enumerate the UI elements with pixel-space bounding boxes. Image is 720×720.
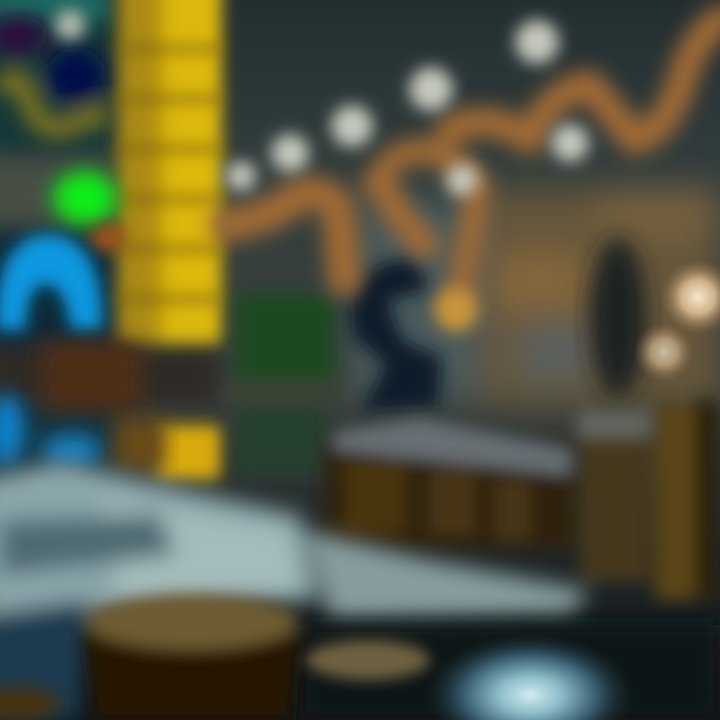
dark figure on the right: [590, 238, 646, 398]
open paper sheet: [0, 462, 590, 720]
white dot in the chart: [55, 10, 85, 40]
brown block: [42, 342, 142, 412]
panel: warm shelves background on the right: [350, 190, 720, 405]
line chart: orange trend line: [225, 20, 720, 300]
bottom left brown corner: [0, 688, 60, 720]
small coin: [306, 640, 430, 680]
table reflection glow: [425, 633, 635, 720]
coin stacks: [325, 400, 720, 600]
yellow column of coins: [118, 0, 222, 480]
blue lower blobs: [0, 394, 102, 466]
chart blobs: navy and purple: [0, 16, 108, 129]
orange block beside yellow coins: [115, 420, 165, 470]
green square panel: [228, 295, 338, 475]
white chart dots: [226, 20, 589, 196]
icon: green blob: [53, 171, 117, 225]
panel: dark left column with chart: [0, 0, 220, 470]
lamp glow: [660, 259, 720, 335]
second lamp glow: [634, 322, 694, 382]
coin column ridges: [117, 44, 223, 304]
orange-red accent: [90, 225, 126, 251]
gold glow at the end of the line: [434, 288, 478, 332]
bowl of grain: [85, 594, 300, 720]
icon: blue gauge arc: [0, 234, 102, 330]
dark navy figure: [350, 258, 442, 412]
dark table: [300, 625, 720, 720]
